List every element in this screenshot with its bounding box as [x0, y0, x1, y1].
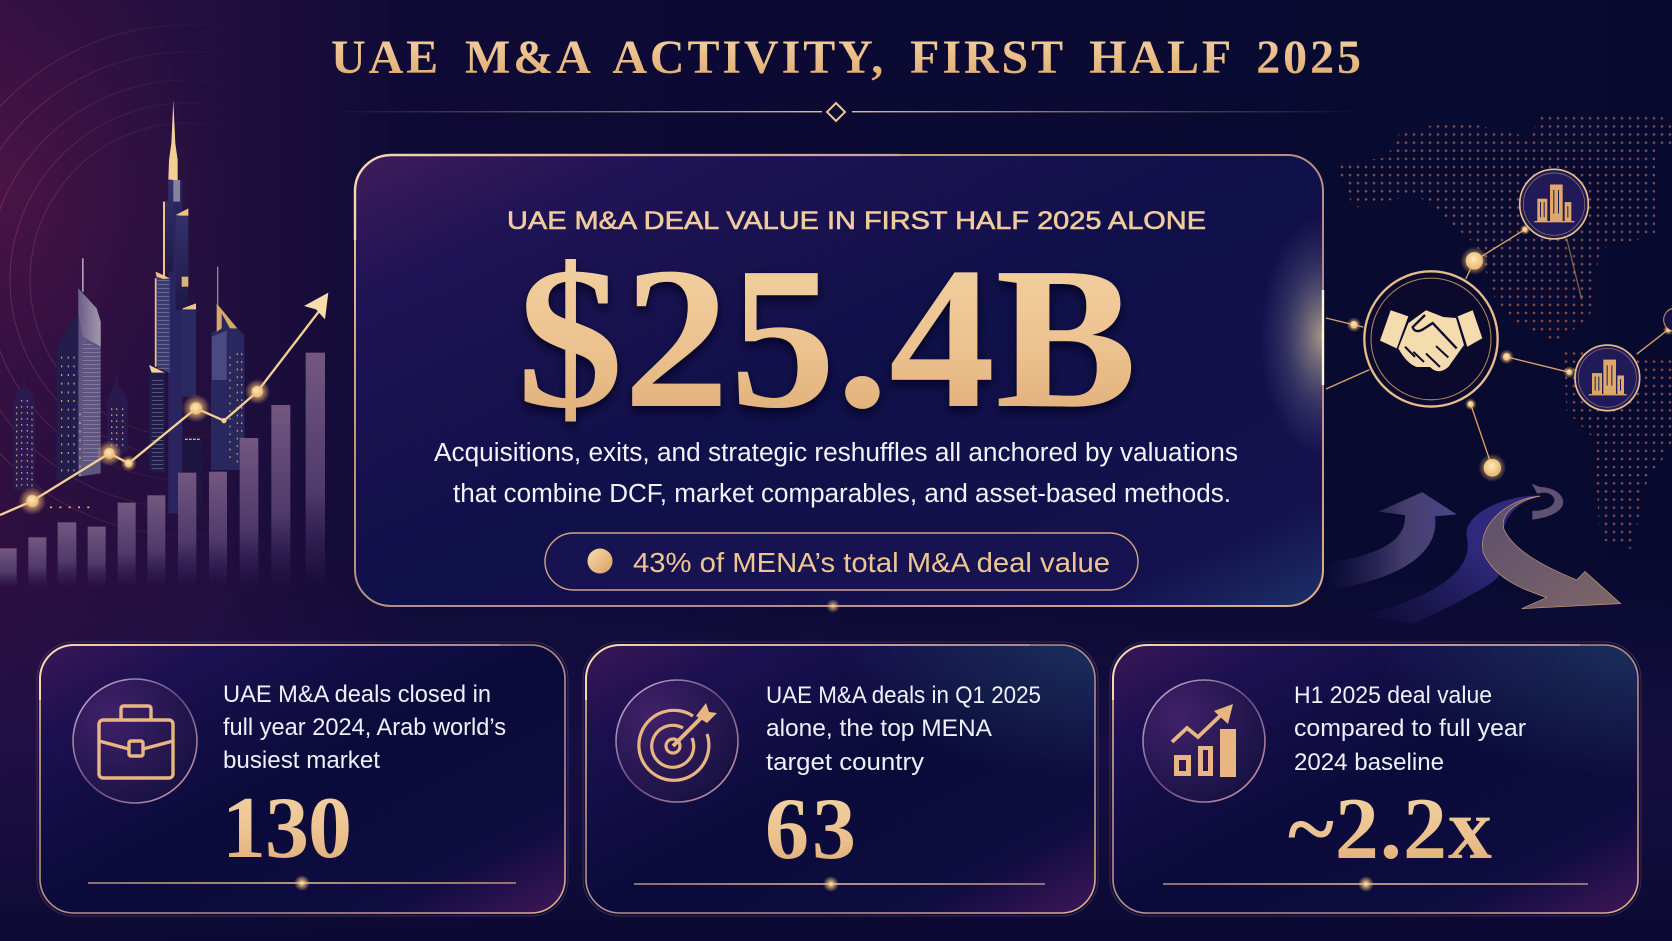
panel label: UAE M&A DEAL VALUE IN FIRST HALF 2025 ALONE [507, 207, 1206, 235]
far-left tower [13, 371, 35, 490]
description [434, 439, 1238, 508]
panel: deals 2024 [37, 642, 568, 916]
description: compared to full year [1294, 715, 1526, 742]
illustration: world map network with handshake [1326, 112, 1672, 624]
panel: headline deal value [355, 155, 1384, 613]
illustration: skyline with growth chart [0, 100, 328, 588]
separator [88, 875, 516, 891]
building medallion right [1575, 345, 1640, 411]
right tower [211, 267, 244, 470]
big number: $25.4B [517, 225, 1137, 450]
description: H1 2025 deal value [1294, 682, 1492, 709]
description: UAE M&A deals in Q1 2025 [766, 682, 1041, 709]
panel: deals Q1 [583, 642, 1098, 916]
building medallion top [1520, 169, 1588, 239]
stat: ~2.2x [1288, 781, 1492, 878]
central tower [50, 100, 202, 513]
description: busiest market [223, 747, 380, 774]
icon: target [616, 680, 738, 802]
callout pill: 43% of MENA’s total M&A deal value [633, 547, 1110, 578]
handshake medallion [1364, 271, 1498, 407]
dotted world map [1337, 112, 1672, 550]
description: that combine DCF, market comparables, and asset-based methods. [453, 480, 1231, 508]
left tower [57, 258, 101, 480]
icon: briefcase [73, 679, 197, 803]
description: full year 2024, Arab world’s [223, 714, 506, 741]
description: target country [766, 749, 924, 776]
decorative concentric arcs [0, 25, 442, 535]
panel: multiple of 2024 [1110, 642, 1641, 916]
stat: 130 [222, 780, 352, 877]
back tower [107, 372, 128, 453]
icon: growth chart [1143, 680, 1265, 802]
description: 2024 baseline [1294, 749, 1444, 776]
network lines [1326, 229, 1670, 468]
title: UAE M&A ACTIVITY, FIRST HALF 2025 [331, 31, 1361, 84]
description: alone, the top MENA [766, 715, 992, 742]
trend line with arrow [0, 293, 328, 515]
separator [1163, 876, 1588, 892]
bars [0, 353, 325, 588]
stat: 63 [765, 781, 856, 878]
description [1294, 682, 1526, 776]
network nodes [1347, 224, 1672, 482]
callout pill [545, 533, 1138, 590]
description [223, 681, 506, 774]
description: Acquisitions, exits, and strategic reshuffles all anchored by valuations [434, 439, 1238, 467]
separator [634, 876, 1045, 892]
description [766, 682, 1041, 776]
partial medallion at edge [1664, 308, 1672, 331]
strategic arrows [1327, 484, 1621, 624]
title divider [328, 103, 1362, 121]
description: UAE M&A deals closed in [223, 681, 491, 708]
